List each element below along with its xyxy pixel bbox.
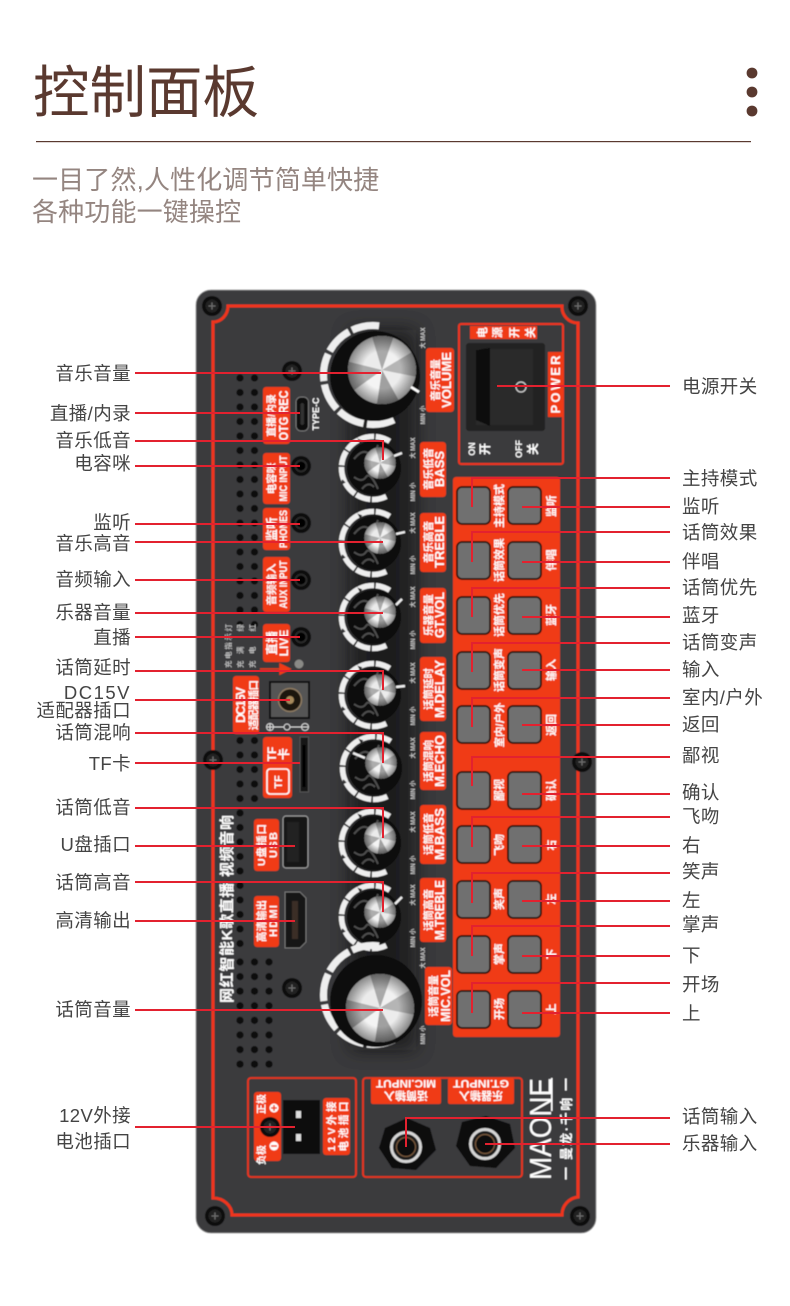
tag: LIVE: LIVE bbox=[277, 630, 291, 656]
min max scale marks: MIN 小 bbox=[409, 556, 417, 574]
menu dots icon bbox=[747, 68, 757, 116]
button captions: 话筒效果 bbox=[492, 538, 506, 582]
battery connector bbox=[283, 1100, 320, 1154]
min max scale marks: 大 MAX bbox=[409, 662, 417, 684]
switch off text bbox=[514, 440, 540, 458]
charging indicator notes: 充电 红 bbox=[247, 624, 257, 668]
tag: M.BASS: 话筒低音 bbox=[422, 813, 435, 855]
callout: 监听: 监听 bbox=[93, 512, 131, 533]
callout: 开场 bbox=[472, 974, 720, 1013]
callout: 话筒低音: 话筒低音 bbox=[55, 797, 131, 818]
callout: 话筒延时 bbox=[55, 657, 383, 690]
panel: control panel body bbox=[196, 290, 596, 1233]
port: mic input jack bbox=[291, 456, 311, 476]
indicator LED bbox=[294, 660, 304, 668]
tag: M.TREBLE bbox=[420, 878, 447, 942]
callout: 左: 左 bbox=[682, 890, 701, 911]
button captions: 下 bbox=[545, 948, 558, 960]
callout: 伴唱: 伴唱 bbox=[682, 551, 720, 572]
charging indicator notes bbox=[223, 624, 257, 668]
subtitle bbox=[32, 165, 379, 227]
knob: bass bbox=[331, 426, 415, 510]
callout: 话筒变声 bbox=[472, 632, 758, 672]
switch on text bbox=[467, 442, 492, 456]
tag: TF bbox=[263, 737, 292, 798]
button captions: 鄙视 bbox=[493, 779, 506, 801]
tag: MIC INPUT bbox=[371, 1077, 441, 1104]
button captions: 上 bbox=[545, 1004, 558, 1014]
callout: 话筒优先: 话筒优先 bbox=[682, 577, 758, 598]
tag: BASS: 音乐低音 bbox=[422, 448, 435, 490]
min max scale marks: MIN 小 bbox=[419, 1026, 427, 1044]
dc polarity symbols bbox=[266, 724, 308, 730]
button captions bbox=[492, 484, 558, 1020]
callout: 直播/内录: 直播/内录 bbox=[50, 403, 131, 424]
callout: 乐器输入: 乐器输入 bbox=[682, 1133, 758, 1154]
button captions: 掌声 bbox=[492, 943, 506, 965]
rocker switch bbox=[466, 343, 545, 431]
tag: TF: TF bbox=[273, 775, 285, 789]
tag: USB: USB bbox=[268, 832, 280, 858]
callout: 话筒优先 bbox=[472, 577, 758, 617]
tag: USB: U盘插口 bbox=[255, 824, 268, 866]
knob: mic treble bbox=[331, 875, 415, 959]
tag: M.ECHO bbox=[420, 732, 447, 790]
switch off text: OFF bbox=[514, 440, 524, 458]
knob: mic bass bbox=[331, 801, 415, 885]
min max scale marks: MIN 小 bbox=[409, 781, 417, 799]
brand vertical text: 网红智能K歌直播 视频音响 bbox=[218, 815, 236, 1003]
tag: M.DELAY bbox=[420, 657, 447, 721]
callout: 飞吻 bbox=[472, 806, 720, 847]
callout: 直播: 直播 bbox=[93, 627, 131, 648]
callout: 音频输入: 音频输入 bbox=[55, 569, 131, 590]
tag: M.BASS bbox=[420, 805, 447, 864]
tag: BASS bbox=[420, 442, 447, 497]
button captions: 笑声 bbox=[492, 888, 506, 910]
button captions: 蓝牙 bbox=[545, 604, 558, 626]
tag: MIC INPUT: MIC INPUT bbox=[278, 455, 290, 502]
tag: DC15V bbox=[233, 676, 260, 734]
button captions: 主持模式 bbox=[492, 484, 506, 528]
callout: 掌声 bbox=[472, 914, 720, 956]
tag: VOLUME bbox=[426, 348, 454, 412]
callout: 下: 下 bbox=[682, 945, 701, 966]
panel: button block bbox=[453, 477, 560, 1037]
callout: 话筒低音 bbox=[55, 797, 383, 838]
callout: 12V外接电池插口: 电池插口 bbox=[55, 1131, 131, 1152]
callout: 音乐音量: 音乐音量 bbox=[55, 363, 131, 384]
button captions: 伴唱 bbox=[544, 549, 558, 571]
tag: 12V bbox=[323, 1098, 350, 1155]
tag: polarity: 正极 bbox=[255, 1094, 268, 1114]
callout: 上: 上 bbox=[682, 1003, 701, 1024]
callout: 话筒延时: 话筒延时 bbox=[55, 657, 131, 678]
callout: DC15V 适配器插口: 适配器插口 bbox=[36, 700, 131, 721]
knob column shadow bbox=[350, 330, 416, 1050]
button captions: 返回 bbox=[545, 714, 558, 736]
port: dc socket bbox=[270, 682, 309, 718]
knob: mic volume bbox=[307, 929, 439, 1061]
tag: HDMI: 高清输出 bbox=[255, 900, 268, 942]
tag: 12V: 电池插口 bbox=[337, 1102, 350, 1152]
min max scale marks: 大 MAX bbox=[419, 947, 427, 969]
callout: TF卡: TF卡 bbox=[89, 753, 131, 774]
callout: 话筒变声: 话筒变声 bbox=[682, 632, 758, 653]
min max scale marks: MIN 小 bbox=[419, 406, 427, 424]
tag: VOLUME: VOLUME bbox=[439, 352, 454, 408]
tag: TREBLE: 音乐高音 bbox=[422, 521, 435, 563]
callout: 音乐高音: 音乐高音 bbox=[55, 533, 131, 554]
knob: volume bbox=[307, 309, 439, 441]
tag: MIC.VOL: 话筒音量 bbox=[427, 975, 440, 1017]
tag: M.TREBLE: M.TREBLE bbox=[432, 880, 447, 940]
charging indicator notes: 充电指示灯 bbox=[223, 624, 233, 668]
tag: TREBLE: TREBLE bbox=[432, 516, 447, 568]
button captions: 右 bbox=[544, 840, 558, 850]
callout: 12V外接电池插口: 12V外接 bbox=[59, 1105, 131, 1126]
label: type-c: TYPE-C bbox=[311, 397, 321, 431]
callout: 电容咪: 电容咪 bbox=[74, 453, 131, 474]
tag: M.DELAY: M.DELAY bbox=[432, 660, 447, 718]
tag: MIC.VOL: MIC.VOL bbox=[438, 970, 453, 1022]
callout: 主持模式: 主持模式 bbox=[682, 468, 758, 489]
button captions: 输入 bbox=[544, 659, 558, 681]
callout: 输入: 输入 bbox=[682, 659, 720, 680]
tag: M.BASS: M.BASS bbox=[432, 808, 447, 860]
button captions: 飞吻 bbox=[492, 834, 506, 856]
port: aux jack bbox=[291, 570, 311, 590]
callout: 话筒效果 bbox=[472, 522, 758, 562]
panel frame bbox=[213, 306, 578, 1215]
tag: HDMI: HDMI bbox=[268, 905, 280, 937]
callout: 蓝牙: 蓝牙 bbox=[682, 605, 720, 626]
callout: 监听: 监听 bbox=[682, 496, 720, 517]
tag: MIC INPUT bbox=[263, 453, 290, 504]
button captions: 左 bbox=[544, 894, 558, 904]
button captions: 确认 bbox=[544, 779, 558, 801]
callout: 确认: 确认 bbox=[682, 782, 720, 803]
callout: 主持模式 bbox=[472, 468, 758, 507]
callout: 音乐低音: 音乐低音 bbox=[55, 430, 131, 451]
button captions: 话筒变声 bbox=[492, 648, 506, 692]
tag: 12V: 12V外接 bbox=[325, 1101, 338, 1152]
min max scale marks: MIN 小 bbox=[409, 483, 417, 501]
tag: DC15V: DC15V bbox=[233, 687, 248, 723]
min max scale marks: MIN 小 bbox=[409, 631, 417, 649]
min max scale marks: MIN 小 bbox=[409, 929, 417, 947]
tag: M.ECHO: 话筒混响 bbox=[422, 740, 435, 782]
port: usb bbox=[283, 816, 308, 868]
callout: DC15V 适配器插口: DC15V bbox=[64, 682, 131, 703]
tag: BASS: BASS bbox=[432, 451, 447, 487]
min max scale marks: 大 MAX bbox=[409, 884, 417, 906]
jack: guitar bbox=[456, 1116, 515, 1168]
tag: USB bbox=[254, 819, 280, 871]
tag: LIVE: 直播 bbox=[264, 631, 279, 655]
callout: 飞吻: 飞吻 bbox=[682, 806, 720, 827]
button captions: 监听 bbox=[544, 495, 558, 517]
subtitle: 各种功能一键操控 bbox=[32, 197, 241, 227]
callout: DC15V 适配器插口 bbox=[36, 682, 290, 721]
tag: polarity: 负极 bbox=[255, 1145, 268, 1165]
tag: GT INPUT bbox=[448, 1077, 514, 1104]
callout: 话筒音量: 话筒音量 bbox=[55, 999, 131, 1020]
min max scale marks: MIN 小 bbox=[409, 707, 417, 725]
tag: GT.VOL bbox=[420, 588, 447, 643]
brand logo: 一 曼龙·千响 一 bbox=[559, 1078, 574, 1180]
switch on text: ON bbox=[467, 442, 477, 456]
callout: 话筒高音 bbox=[55, 872, 383, 912]
tag: MIC INPUT: MIC.INPUT bbox=[376, 1077, 436, 1089]
tag: DC15V: 适配器插口 bbox=[247, 680, 260, 730]
panel: input jacks bbox=[363, 1077, 522, 1177]
min max scale marks: 大 MAX bbox=[409, 437, 417, 459]
knob: treble bbox=[331, 501, 415, 585]
callout: 话筒输入: 话筒输入 bbox=[682, 1106, 758, 1127]
tag: AUX INPUT: AUX INPUT bbox=[278, 560, 290, 608]
knob: mic echo bbox=[332, 726, 416, 810]
tag: TREBLE bbox=[420, 513, 447, 572]
callout: U盘插口: U盘插口 bbox=[61, 834, 131, 855]
tag: GT INPUT: 乐器输入 bbox=[459, 1089, 503, 1103]
button captions: 话筒优先 bbox=[492, 593, 506, 637]
brand logo: MAONE bbox=[523, 1078, 558, 1180]
callout: 返回: 返回 bbox=[682, 714, 720, 735]
knob: mic delay bbox=[331, 653, 415, 737]
right buttons bbox=[508, 487, 541, 1028]
callout: 开场: 开场 bbox=[682, 974, 720, 995]
tag: HDMI bbox=[254, 896, 280, 947]
callout: 右: 右 bbox=[682, 835, 701, 856]
callout: 鄙视 bbox=[472, 745, 720, 786]
min max scale marks: 大 MAX bbox=[409, 512, 417, 534]
tag: TF: 卡 bbox=[276, 748, 291, 760]
callout: 乐器音量: 乐器音量 bbox=[55, 602, 131, 623]
min max scale marks: 大 MAX bbox=[419, 327, 427, 349]
header divider bbox=[36, 141, 751, 142]
port: type-c bbox=[296, 397, 308, 431]
callout: 室内/户外 bbox=[472, 687, 763, 727]
callout: 电源开关: 电源开关 bbox=[682, 376, 758, 397]
callout: 话筒高音: 话筒高音 bbox=[55, 872, 131, 893]
tag: OTG REC: OTG REC bbox=[276, 390, 291, 440]
tag: power title: 电源开关 bbox=[475, 327, 537, 338]
tag: LIVE bbox=[263, 624, 291, 662]
port: phones jack bbox=[291, 513, 311, 533]
title: 控制面板 bbox=[33, 61, 259, 124]
tag: OTG REC bbox=[263, 387, 291, 444]
min max scale marks: 大 MAX bbox=[409, 586, 417, 608]
port: tf slot bbox=[300, 737, 308, 792]
charging arrow bbox=[260, 664, 290, 674]
tag: PHONES: 监听 bbox=[264, 517, 279, 541]
button captions: 开场 bbox=[493, 998, 506, 1020]
min max scale marks bbox=[409, 327, 427, 1044]
tag: MIC.VOL bbox=[425, 967, 453, 1025]
tag: OTG REC: 直播/内录 bbox=[265, 394, 278, 437]
panel: 12v battery port bbox=[248, 1078, 356, 1177]
tag: M.DELAY: 话筒延时 bbox=[422, 668, 435, 710]
tag: GT.VOL: GT.VOL bbox=[432, 592, 447, 638]
tag: AUX INPUT: 音频输入 bbox=[265, 563, 278, 606]
charging indicator notes: 充满 绿 bbox=[235, 624, 245, 668]
tag: VOLUME: 音乐音量 bbox=[429, 359, 442, 401]
callout: 笑声 bbox=[472, 861, 720, 903]
screws bbox=[202, 296, 592, 1226]
tag: MIC INPUT: 话筒输入 bbox=[384, 1089, 428, 1103]
screw bbox=[260, 1117, 280, 1137]
panel: power switch bbox=[459, 324, 563, 464]
port: live jack bbox=[291, 627, 311, 647]
port: hdmi bbox=[285, 892, 306, 948]
callout: 话筒效果: 话筒效果 bbox=[682, 522, 758, 543]
tag: POWER: POWER bbox=[548, 355, 563, 414]
switch on text: 开 bbox=[478, 443, 492, 455]
min max scale marks: 大 MAX bbox=[409, 811, 417, 833]
tag: polarity bbox=[254, 1092, 281, 1165]
tag: TF: TF bbox=[265, 747, 279, 761]
tag: PHONES: PHONES bbox=[278, 510, 290, 548]
speaker holes bbox=[233, 371, 276, 1072]
min max scale marks: MIN 小 bbox=[409, 856, 417, 874]
callout: 掌声: 掌声 bbox=[682, 914, 720, 935]
knob: guitar volume bbox=[331, 575, 415, 659]
tag: GT.VOL: 乐器音量 bbox=[422, 594, 435, 636]
tag: M.TREBLE: 话筒高音 bbox=[422, 889, 435, 931]
left buttons bbox=[457, 487, 490, 1028]
subtitle: 一目了然,人性化调节简单快捷 bbox=[32, 165, 379, 195]
tag: PHONES bbox=[263, 508, 290, 550]
callout: 音乐低音 bbox=[55, 430, 383, 460]
tag: MIC INPUT: 电容咪 bbox=[265, 462, 278, 494]
callout: 话筒混响: 话筒混响 bbox=[55, 722, 131, 743]
callout: 话筒输入 bbox=[406, 1106, 758, 1147]
jack: mic bbox=[379, 1118, 436, 1170]
button captions: 室内/户外 bbox=[493, 702, 506, 747]
brand logo bbox=[523, 1078, 574, 1180]
callout: 笑声: 笑声 bbox=[682, 861, 720, 882]
tag: M.ECHO: M.ECHO bbox=[432, 735, 447, 787]
switch off text: 关 bbox=[525, 443, 540, 455]
min max scale marks: 大 MAX bbox=[409, 737, 417, 759]
callout: 室内/户外: 室内/户外 bbox=[682, 687, 763, 708]
tag: AUX INPUT bbox=[263, 557, 290, 612]
callout: 话筒混响 bbox=[55, 722, 383, 763]
callout: 12V外接电池插口 bbox=[55, 1105, 295, 1152]
callout: 高清输出: 高清输出 bbox=[55, 910, 131, 931]
callout: 鄙视: 鄙视 bbox=[682, 745, 720, 766]
tag: GT INPUT: GT.INPUT bbox=[453, 1077, 509, 1089]
